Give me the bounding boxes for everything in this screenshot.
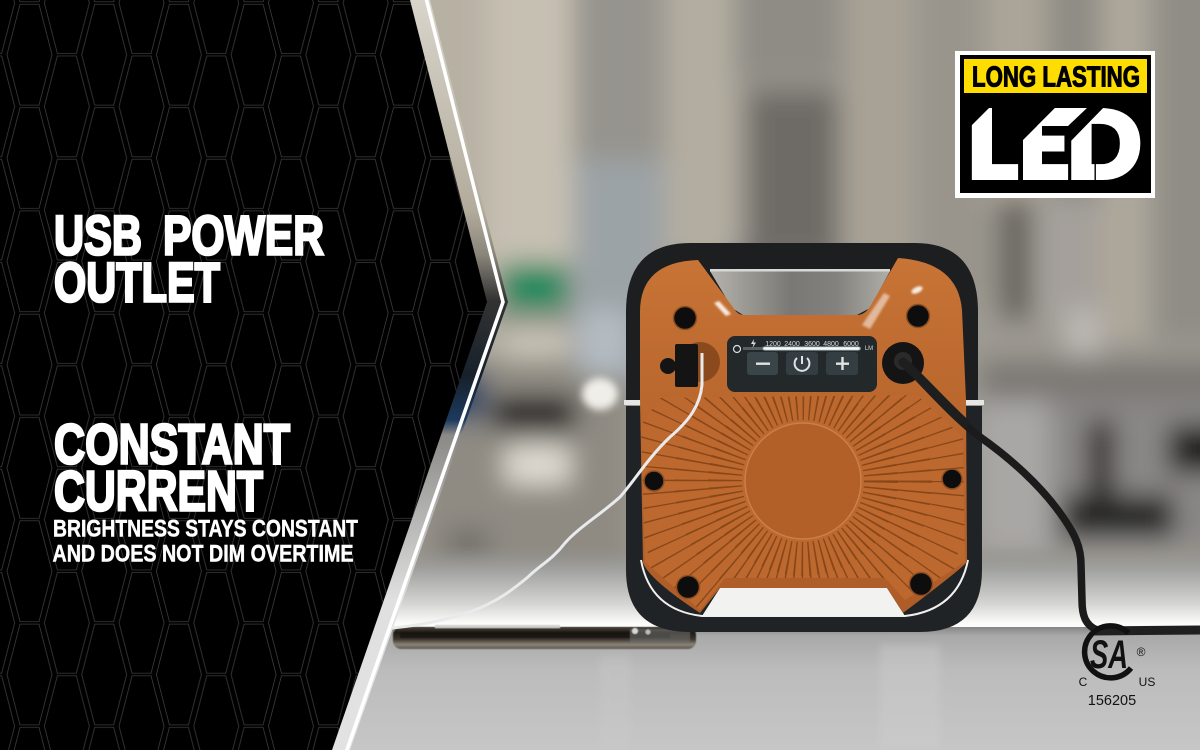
description text: BRIGHTNESS STAYS CONSTANT [53,516,358,542]
control panel: 1200 [765,341,781,348]
badge: long lasting LED: L [968,90,1018,198]
central round disc [745,423,861,539]
CSA certification mark: 156205 [1088,693,1136,709]
sunburst heat-sink ribs [641,395,965,610]
phone lying on floor [393,625,696,649]
heading: USB power outlet [54,204,324,314]
CSA certification mark [1079,626,1155,709]
heading: USB power outlet: OUTLET [54,251,220,314]
control panel: 2400 [784,341,800,348]
screws [644,304,962,598]
control panel: LM [865,346,873,352]
CSA certification mark: ® [1137,645,1146,659]
panel: black chevron with hexagon pattern [0,0,487,750]
heading: constant current: CONSTANT [54,413,290,477]
badge: long lasting LED: LONG LASTING [972,62,1140,94]
control panel: 4800 [823,341,839,348]
badge: long lasting LED [955,51,1155,198]
control panel [727,336,877,392]
power cord socket and cable [882,342,1200,631]
USB port and plug [660,342,720,387]
heading: constant current [54,413,290,524]
CSA certification mark: US [1139,675,1155,689]
floor with bright horizon [330,545,1200,750]
device: portable LED work light, back view [392,243,1200,676]
chevron translucent strip and white edge [325,0,508,750]
black protective frame [624,243,984,632]
badge: long lasting LED: E [1020,90,1069,198]
USB white cable to phone [392,353,702,628]
orange housing [640,258,967,613]
control panel: 6000 [843,341,859,348]
heading: USB power outlet: USB [54,204,142,267]
bright bokeh spot [582,378,618,410]
CSA certification mark: C [1079,675,1088,689]
badge: long lasting LED: D [1067,90,1142,198]
CSA certification mark: SA [1090,633,1128,677]
description text [52,516,358,568]
control panel: 3600 [804,341,820,348]
glossy highlights on housing [714,285,924,329]
description text: AND DOES NOT DIM OVERTIME [52,540,354,568]
heading: USB power outlet: POWER [163,204,324,267]
heading: constant current: CURRENT [54,460,263,524]
